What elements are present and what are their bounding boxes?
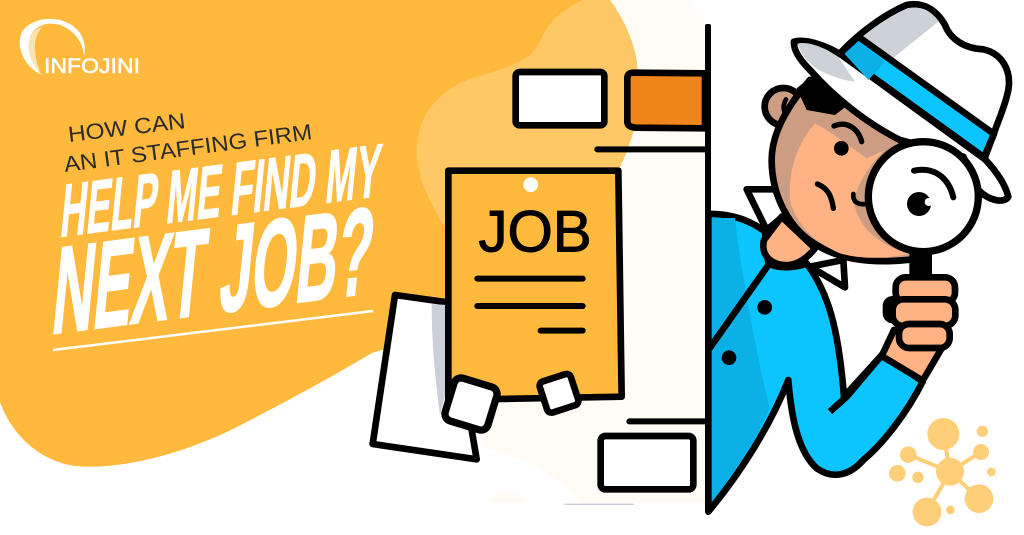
job document	[448, 171, 622, 400]
grey base line	[565, 502, 633, 506]
thumb knob	[883, 296, 903, 323]
hat brim	[794, 41, 1008, 201]
jacket buttons	[757, 300, 772, 315]
hand fingers	[893, 277, 955, 348]
hat crown	[840, 4, 1009, 157]
crown shade	[863, 8, 938, 61]
wall edge	[705, 24, 711, 513]
face highlight	[790, 123, 908, 258]
logo wordmark: INFOJINI	[44, 55, 140, 78]
jacket shade	[712, 218, 769, 502]
eyebrow	[834, 124, 862, 142]
paper shadow	[432, 304, 449, 415]
document pin	[523, 177, 538, 192]
back paper	[373, 295, 477, 459]
tape right	[538, 373, 580, 414]
network icon	[889, 418, 996, 526]
heading intro line 2: AN IT STAFFING FIRM	[62, 119, 313, 177]
text: NEXT JOB?	[47, 181, 381, 361]
detective	[708, 4, 1009, 512]
heading intro line 1: HOW CAN	[67, 108, 187, 147]
lapel	[708, 265, 768, 350]
sticky card bottom	[601, 436, 693, 489]
logo	[20, 19, 140, 78]
tape left	[443, 376, 499, 432]
sticky card white	[516, 72, 604, 125]
collar right	[810, 260, 845, 287]
magnifier handle	[909, 250, 932, 280]
magnified eye	[907, 192, 933, 216]
heading underline	[53, 311, 373, 350]
magnifier lens	[868, 142, 978, 252]
background blob: light orange	[417, 0, 638, 240]
ear	[765, 88, 802, 125]
neck	[763, 217, 815, 265]
background blob: orange	[0, 0, 590, 467]
divider line upper	[597, 140, 705, 158]
arm inner line	[830, 353, 883, 412]
mouth line	[853, 194, 868, 204]
magnified eyebrow	[914, 170, 953, 197]
wrist	[882, 330, 943, 381]
nose line	[817, 184, 833, 208]
head	[772, 80, 933, 261]
document lines	[477, 279, 583, 331]
collar left	[747, 189, 787, 230]
sticky card orange	[627, 73, 705, 128]
heading line 1: HELP ME FIND MY	[57, 128, 385, 253]
jacket	[708, 214, 923, 512]
divider line lower	[629, 412, 705, 430]
job label: JOB	[478, 199, 592, 264]
band shade	[845, 41, 885, 80]
hair	[797, 73, 850, 115]
eye	[834, 141, 849, 156]
logo ring	[20, 19, 85, 75]
job board illustration	[373, 72, 705, 504]
brim shade	[798, 43, 855, 82]
hat band	[840, 37, 994, 157]
